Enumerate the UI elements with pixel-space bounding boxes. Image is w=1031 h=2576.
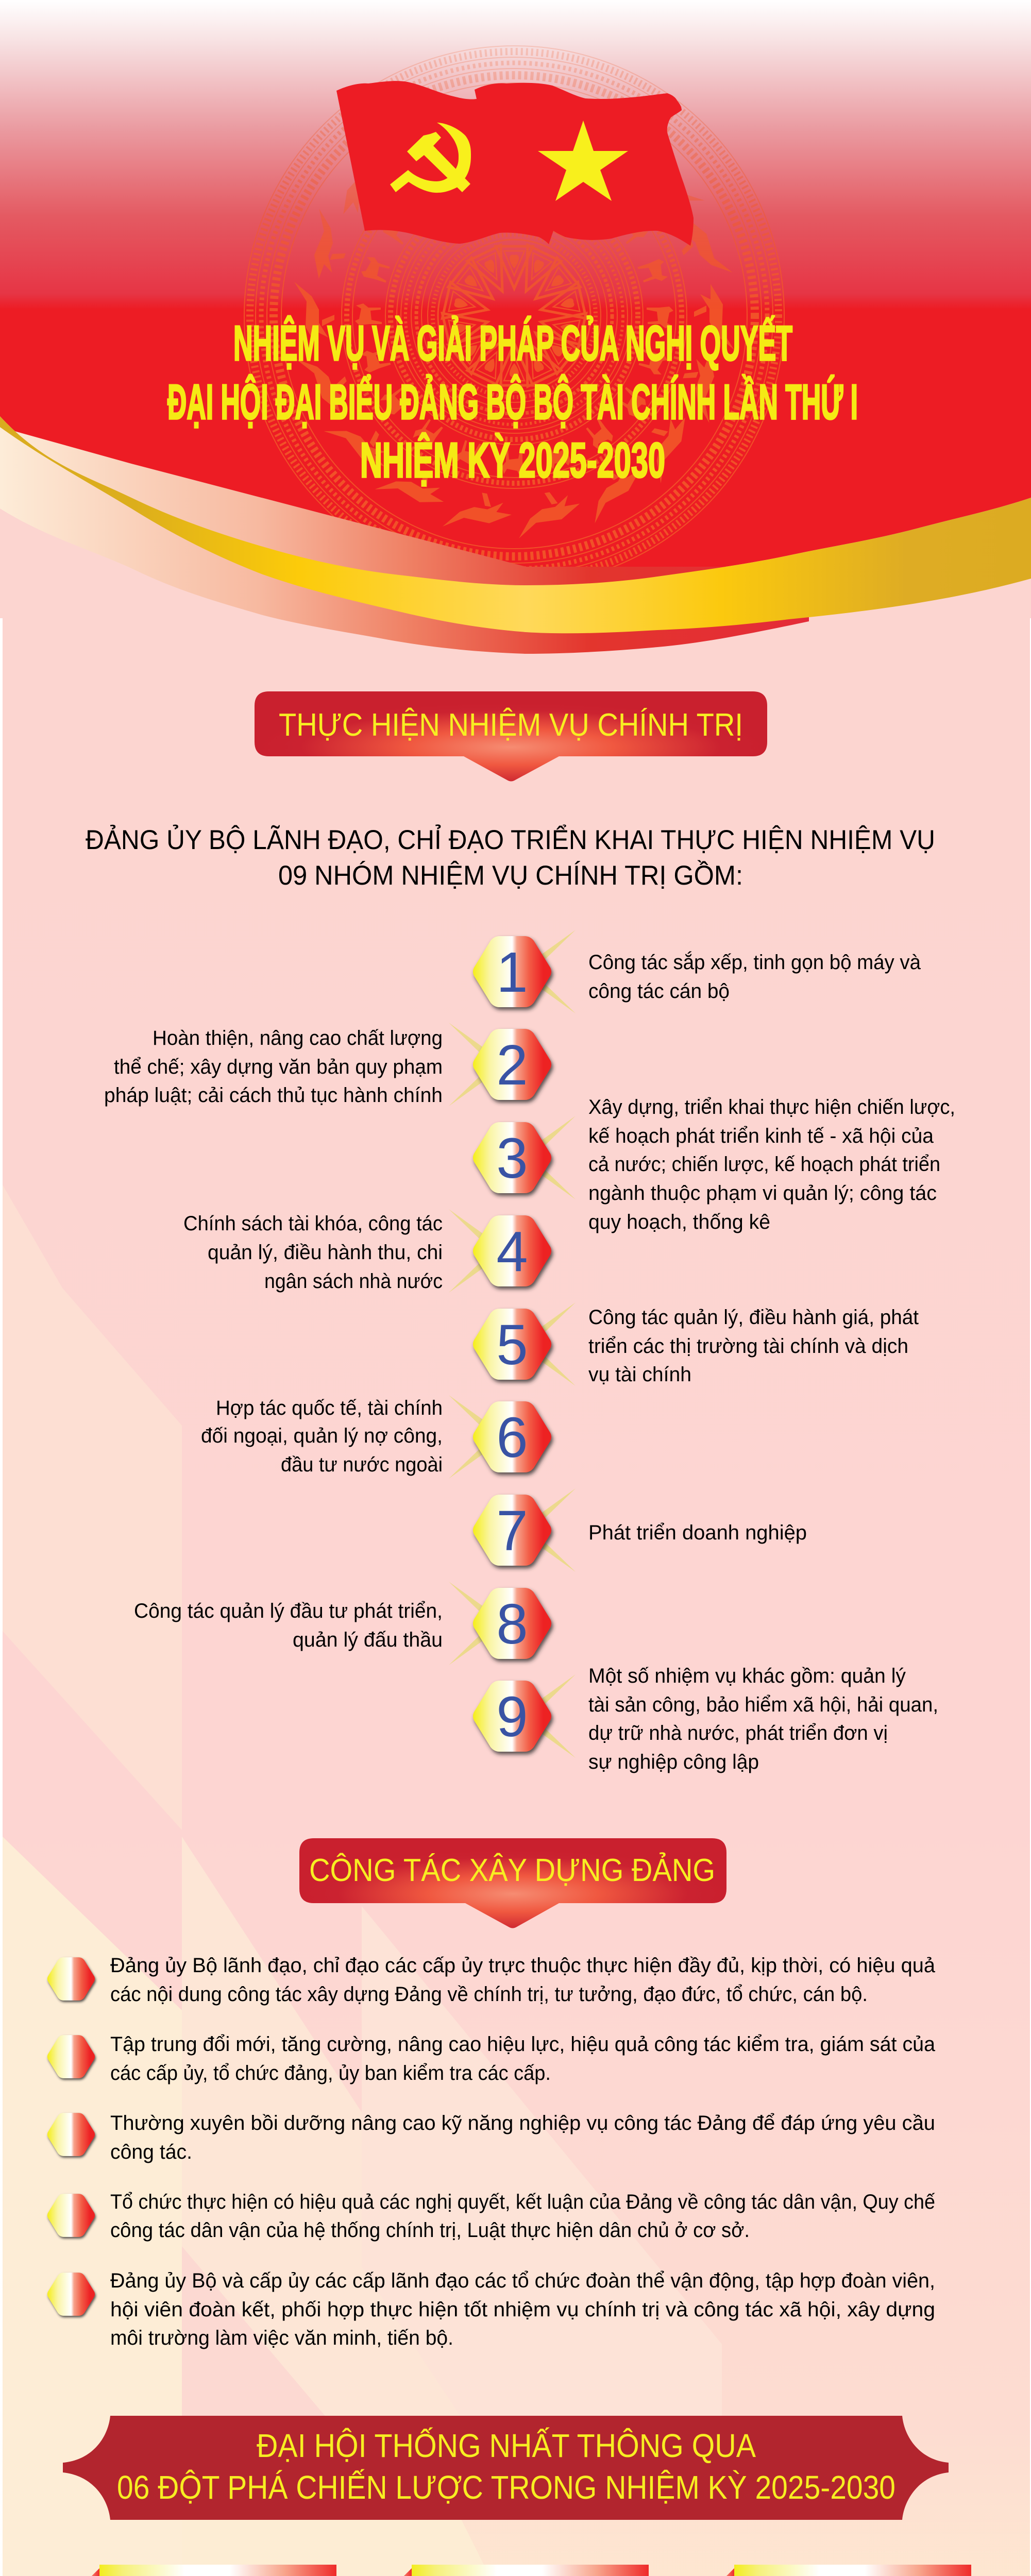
item 6: 6 [496,1406,528,1469]
ribbon card 2 [357,2565,649,2576]
heading: six strategic breakthroughs: 06 ĐỘT PHÁ CHIẾN LƯỢC TRONG NHIỆM KỲ 2025-2030 [117,2469,895,2506]
item 9: Một số nhiệm vụ khác gồm: quản lý [588,1665,906,1687]
bullet 5 [47,2269,935,2349]
item 2 [104,1023,551,1107]
heading: political tasks: THỰC HIỆN NHIỆM VỤ CHÍNH TRỊ [279,707,743,743]
item 7: 7 [496,1499,528,1563]
item 3: cả nước; chiến lược, kế hoạch phát triển [588,1153,940,1176]
item 9: tài sản công, bảo hiểm xã hội, hải quan, [588,1693,938,1716]
bullet 5: hội viên đoàn kết, phối hợp thực hiện tốt nhiệm vụ chính trị và công tác xã hội, xây dựng [110,2298,935,2321]
item 4 [183,1209,551,1293]
item 5: vụ tài chính [588,1363,691,1386]
item 7: Phát triển doanh nghiệp [588,1521,807,1544]
header red background [0,0,1031,585]
item 2: Hoàn thiện, nâng cao chất lượng [153,1027,443,1049]
bullet 4 [47,2191,935,2242]
item 9: 9 [496,1685,528,1749]
item 1: Công tác sắp xếp, tinh gọn bộ máy và [588,951,921,974]
item 5: 5 [496,1313,528,1377]
item 8: Công tác quản lý đầu tư phát triển, [134,1600,443,1622]
item 5: triển các thị trường tài chính và dịch [588,1335,908,1358]
title: NHIỆM KỲ 2025-2030 [360,432,665,488]
item 4: ngân sách nhà nước [264,1270,443,1293]
item 9 [473,1665,938,1773]
bullet 4: Tổ chức thực hiện có hiệu quả các nghị quyết, kết luận của Đảng về công tác dân vận, Quy chế [110,2191,935,2213]
item 6: đối ngoại, quản lý nợ công, [201,1425,443,1447]
item 1: công tác cán bộ [588,980,730,1003]
heading: party building: CÔNG TÁC XÂY DỰNG ĐẢNG [309,1853,715,1888]
item 2: pháp luật; cải cách thủ tục hành chính [104,1084,443,1107]
intro text [86,824,935,891]
heading: political tasks [255,691,767,781]
bullet 3: Thường xuyên bồi dưỡng nâng cao kỹ năng nghiệp vụ công tác Đảng để đáp ứng yêu cầu [110,2112,935,2134]
item 6 [201,1395,551,1479]
bullet 5: Đảng ủy Bộ và cấp ủy các cấp lãnh đạo các tổ chức đoàn thể vận động, tập hợp đoàn viên, [110,2269,935,2292]
item 4: quản lý, điều hành thu, chi [208,1241,443,1264]
intro text: 09 NHÓM NHIỆM VỤ CHÍNH TRỊ GỒM: [278,860,743,891]
numbered list of 9 task groups [104,930,955,1773]
item 3: ngành thuộc phạm vi quản lý; công tác [588,1182,937,1205]
item 8: quản lý đấu thầu [293,1629,443,1651]
gold ribbon [0,416,1031,633]
cream to red ribbon [0,427,809,654]
heading: six strategic breakthroughs: ĐẠI HỘI THỐNG NHẤT THÔNG QUA [257,2427,756,2464]
item 8: 8 [496,1592,528,1656]
bullet 3: công tác. [110,2141,192,2163]
item 3: 3 [496,1127,528,1190]
item 3 [473,1096,955,1233]
item 2: 2 [496,1033,528,1097]
item 6: Hợp tác quốc tế, tài chính [216,1397,443,1419]
party building bullet list [47,1954,936,2349]
bullet 1 [47,1954,936,2006]
heading: six strategic breakthroughs [63,2416,949,2520]
bullet 1: Đảng ủy Bộ lãnh đạo, chỉ đạo các cấp ủy trực thuộc thực hiện đầy đủ, kịp thời, có hiệu quả [110,1954,936,1977]
title [167,315,858,488]
heading: party building [299,1838,726,1928]
bullet 1: các nội dung công tác xây dựng Đảng về chính trị, tư tưởng, đạo đức, tổ chức, cán bộ. [110,1983,868,2006]
item 1: 1 [496,941,528,1004]
bullet 2 [47,2033,936,2084]
item 2: thể chế; xây dựng văn bản quy phạm [114,1056,443,1078]
intro text: ĐẢNG ỦY BỘ LÃNH ĐẠO, CHỈ ĐẠO TRIỂN KHAI THỰC HIỆN NHIỆM VỤ [86,824,935,855]
item 4: Chính sách tài khóa, công tác [183,1212,443,1235]
bronze drum emblem [244,46,784,586]
item 3: Xây dựng, triển khai thực hiện chiến lược, [588,1096,955,1118]
ribbon card 3 [680,2565,971,2576]
flag with hammer and sickle and star [336,81,694,246]
item 1 [473,930,921,1013]
icon: hammer and sickle [390,123,471,193]
item 6: đầu tư nước ngoài [281,1453,443,1476]
item 9: dự trữ nhà nước, phát triển đơn vị [588,1722,888,1744]
item 4: 4 [496,1220,528,1283]
bullet 4: công tác dân vận của hệ thống chính trị, Luật thực hiện dân chủ ở cơ sở. [110,2219,750,2242]
item 3: kế hoạch phát triển kinh tế - xã hội của [588,1125,934,1147]
icon: star [538,121,628,201]
bullet 2: các cấp ủy, tổ chức đảng, ủy ban kiểm tra các cấp. [110,2062,551,2084]
item 8 [134,1582,551,1665]
bullet 5: môi trường làm việc văn minh, tiến bộ. [110,2327,453,2349]
bullet 3 [47,2112,935,2163]
ribbon card 1 [45,2565,336,2576]
item 7 [473,1488,807,1572]
item 9: sự nghiệp công lập [588,1751,759,1773]
bullet 2: Tập trung đổi mới, tăng cường, nâng cao hiệu lực, hiệu quả công tác kiểm tra, giám sát của [110,2033,936,2056]
item 5 [473,1302,919,1386]
item 3: quy hoạch, thống kê [588,1211,770,1233]
item 5: Công tác quản lý, điều hành giá, phát [588,1306,919,1329]
